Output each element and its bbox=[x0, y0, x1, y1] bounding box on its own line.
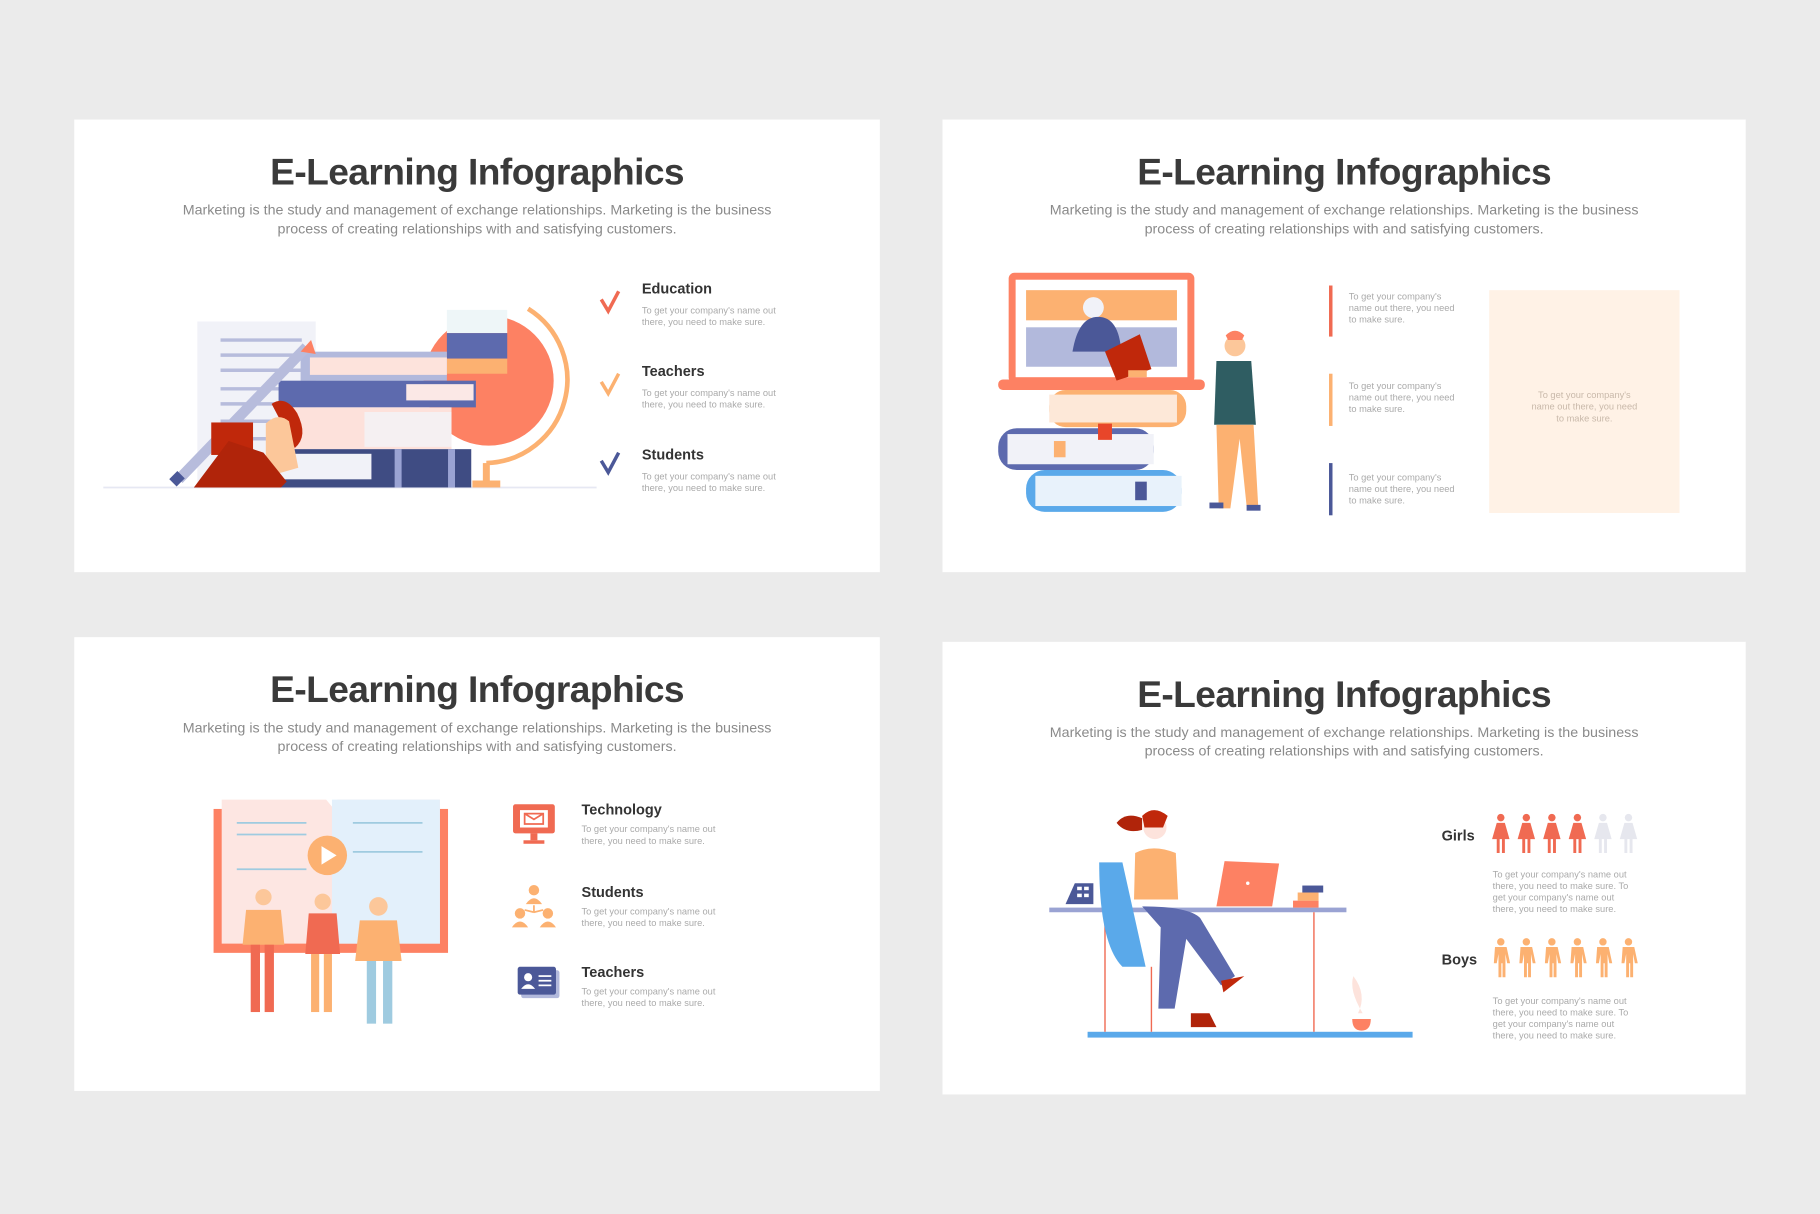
text bars bbox=[1329, 286, 1455, 516]
subtitle: Marketing is the study and management of exchange relationships. Marketing is the business bbox=[183, 202, 771, 218]
boys row: there, you need to make sure. To bbox=[1493, 1007, 1628, 1018]
icon row: girls bbox=[1492, 814, 1637, 853]
icon: group bbox=[512, 885, 556, 928]
boys row: there, you need to make sure. bbox=[1493, 1031, 1616, 1041]
subtitle bbox=[1050, 724, 1638, 759]
item: teachers bbox=[518, 964, 716, 1009]
panel: laptop and books bbox=[942, 120, 1746, 572]
illustration: open book with people bbox=[214, 800, 448, 1024]
icon: check red bbox=[600, 290, 620, 314]
subtitle: Marketing is the study and management of exchange relationships. Marketing is the business bbox=[183, 720, 771, 736]
item: technology: To get your company's name out bbox=[582, 824, 715, 834]
item: technology: there, you need to make sure. bbox=[582, 836, 705, 846]
subtitle: Marketing is the study and management of exchange relationships. Marketing is the business bbox=[1050, 724, 1638, 740]
item: students: there, you need to make sure. bbox=[582, 918, 705, 928]
icon: check orange bbox=[600, 372, 620, 397]
panel: girls and boys bbox=[942, 642, 1746, 1094]
girls row: there, you need to make sure. To bbox=[1493, 881, 1628, 891]
girls row: To get your company's name out bbox=[1493, 869, 1627, 880]
item: education: To get your company's name out bbox=[642, 305, 776, 316]
item: education: there, you need to make sure. bbox=[642, 317, 765, 327]
item: students: Students bbox=[582, 884, 644, 901]
icon row: boys bbox=[1494, 938, 1638, 978]
subtitle bbox=[183, 720, 771, 754]
title: E-Learning Infographics bbox=[1137, 673, 1551, 715]
text bars: to make sure. bbox=[1349, 496, 1405, 506]
item: teachers: To get your company's name out bbox=[582, 987, 715, 997]
item: teachers bbox=[600, 363, 776, 410]
boys row bbox=[1442, 938, 1638, 1041]
title: E-Learning Infographics bbox=[1137, 151, 1551, 193]
icon: monitor bbox=[513, 804, 555, 844]
item: students: To get your company's name out bbox=[642, 471, 776, 482]
text bars: to make sure. bbox=[1349, 404, 1405, 414]
panel: education bbox=[74, 120, 880, 572]
illustration: laptop on books with man bbox=[998, 272, 1261, 512]
text bars: name out there, you need bbox=[1349, 303, 1455, 313]
girls row bbox=[1442, 814, 1637, 915]
icon: check blue bbox=[600, 452, 620, 476]
text bars: To get your company's bbox=[1349, 291, 1441, 302]
item: teachers: Teachers bbox=[642, 363, 705, 380]
title: E-Learning Infographics bbox=[270, 151, 684, 193]
text bars: To get your company's bbox=[1349, 381, 1441, 391]
text bars: name out there, you need bbox=[1349, 484, 1455, 494]
item: students bbox=[512, 884, 716, 928]
subtitle: process of creating relationships with and satisfying customers. bbox=[278, 221, 677, 237]
callout box: name out there, you need bbox=[1531, 402, 1637, 412]
item: teachers: there, you need to make sure. bbox=[582, 998, 705, 1009]
item: education: Education bbox=[642, 281, 712, 297]
callout box bbox=[1489, 290, 1680, 513]
boys row: Boys bbox=[1442, 952, 1477, 968]
item: education bbox=[600, 281, 776, 327]
item: technology bbox=[513, 802, 716, 846]
subtitle bbox=[1050, 202, 1638, 237]
subtitle: process of creating relationships with and satisfying customers. bbox=[278, 738, 677, 754]
boys row: get your company's name out bbox=[1493, 1019, 1614, 1029]
text bars: To get your company's bbox=[1349, 472, 1441, 483]
subtitle: process of creating relationships with and satisfying customers. bbox=[1145, 221, 1544, 237]
callout box: To get your company's bbox=[1538, 390, 1631, 400]
item: students: Students bbox=[642, 447, 704, 463]
panel: book and people bbox=[74, 637, 880, 1091]
title: E-Learning Infographics bbox=[270, 669, 684, 710]
item: students: there, you need to make sure. bbox=[642, 483, 765, 493]
illustration: woman at desk bbox=[1049, 810, 1413, 1038]
subtitle: process of creating relationships with and satisfying customers. bbox=[1145, 743, 1544, 759]
girls row: Girls bbox=[1442, 828, 1475, 844]
icon: id card bbox=[518, 966, 560, 998]
subtitle bbox=[183, 202, 771, 237]
subtitle: Marketing is the study and management of exchange relationships. Marketing is the business bbox=[1050, 202, 1638, 218]
illustration: books, globe, woman bbox=[103, 306, 596, 488]
item: students: To get your company's name out bbox=[582, 906, 715, 917]
callout box: to make sure. bbox=[1556, 413, 1612, 424]
item: teachers: Teachers bbox=[582, 964, 644, 981]
item: students bbox=[600, 447, 776, 493]
girls row: there, you need to make sure. bbox=[1493, 904, 1616, 915]
item: teachers: there, you need to make sure. bbox=[642, 399, 765, 410]
girls row: get your company's name out bbox=[1493, 893, 1614, 903]
text bars: name out there, you need bbox=[1349, 392, 1455, 403]
text bars: to make sure. bbox=[1349, 315, 1405, 325]
item: teachers: To get your company's name out bbox=[642, 388, 776, 398]
boys row: To get your company's name out bbox=[1493, 996, 1627, 1006]
item: technology: Technology bbox=[582, 802, 662, 818]
